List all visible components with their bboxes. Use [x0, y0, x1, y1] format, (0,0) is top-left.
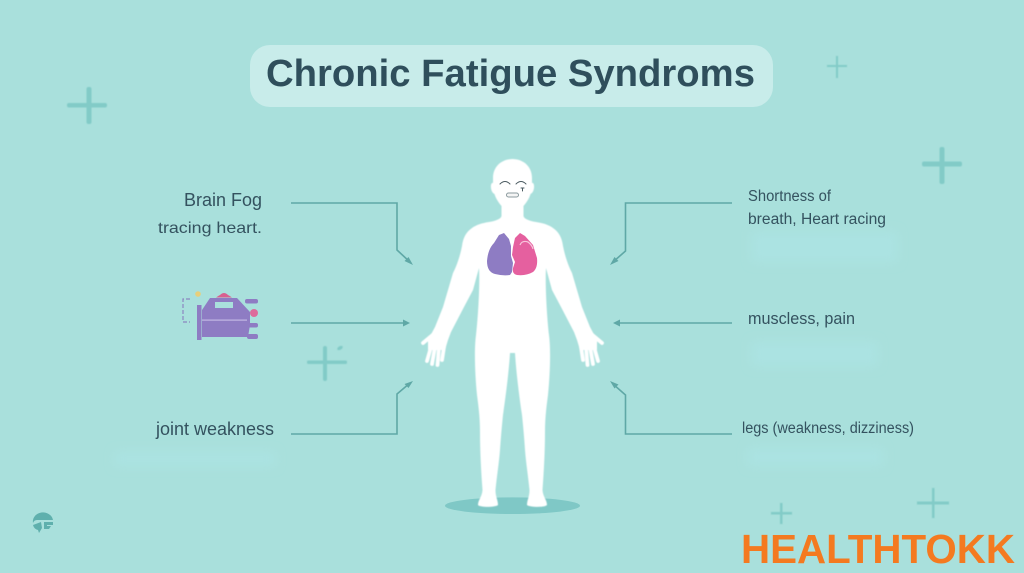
label: shortness of breath: Shortness of — [748, 188, 832, 205]
heart: pink — [512, 233, 537, 275]
heart highlight — [520, 241, 533, 249]
arrow: middle left — [291, 320, 410, 326]
plus: top left — [67, 87, 107, 124]
plus: centre left with leaf — [307, 345, 347, 381]
label: joint weakness: joint weakness — [155, 419, 274, 439]
title text: Chronic Fatigue Syndroms — [266, 53, 755, 95]
human body figure — [423, 159, 602, 507]
arrow: top right — [610, 203, 732, 265]
callout: joint weakness — [155, 381, 413, 439]
callout: muscle pain — [613, 309, 855, 328]
callout: legs — [610, 381, 914, 437]
label: legs: legs (weakness, dizziness) — [742, 420, 914, 437]
label: tracing heart: tracing heart. — [158, 220, 262, 237]
ground shadow — [445, 497, 580, 514]
body silhouette — [423, 159, 602, 507]
callout: shortness of breath — [610, 188, 886, 265]
label: brain fog: Brain Fog — [184, 189, 262, 210]
icon: logo mark — [33, 512, 53, 533]
watermark: healthtokk: HEALTHTOKK — [741, 526, 1015, 572]
plus: right large — [922, 147, 962, 184]
callout: bed icon — [183, 291, 410, 340]
arrow: bottom left — [291, 381, 413, 434]
face — [500, 182, 526, 197]
plus: bottom small — [771, 503, 792, 524]
arrow: middle right — [613, 320, 732, 326]
decorative plus marks — [67, 56, 962, 524]
arrow: bottom right — [610, 381, 732, 434]
title — [250, 45, 773, 107]
arrow: top left — [291, 203, 413, 265]
icon: bed — [183, 291, 258, 340]
title panel — [250, 45, 773, 107]
callout: brain fog — [158, 189, 413, 265]
lung: purple — [487, 233, 513, 275]
plus: top right small — [827, 56, 847, 78]
label: muscle pain: muscless, pain — [748, 309, 855, 328]
callout: shortness of breath: breath, Heart racing — [748, 211, 886, 228]
plus: bottom right — [917, 488, 949, 518]
